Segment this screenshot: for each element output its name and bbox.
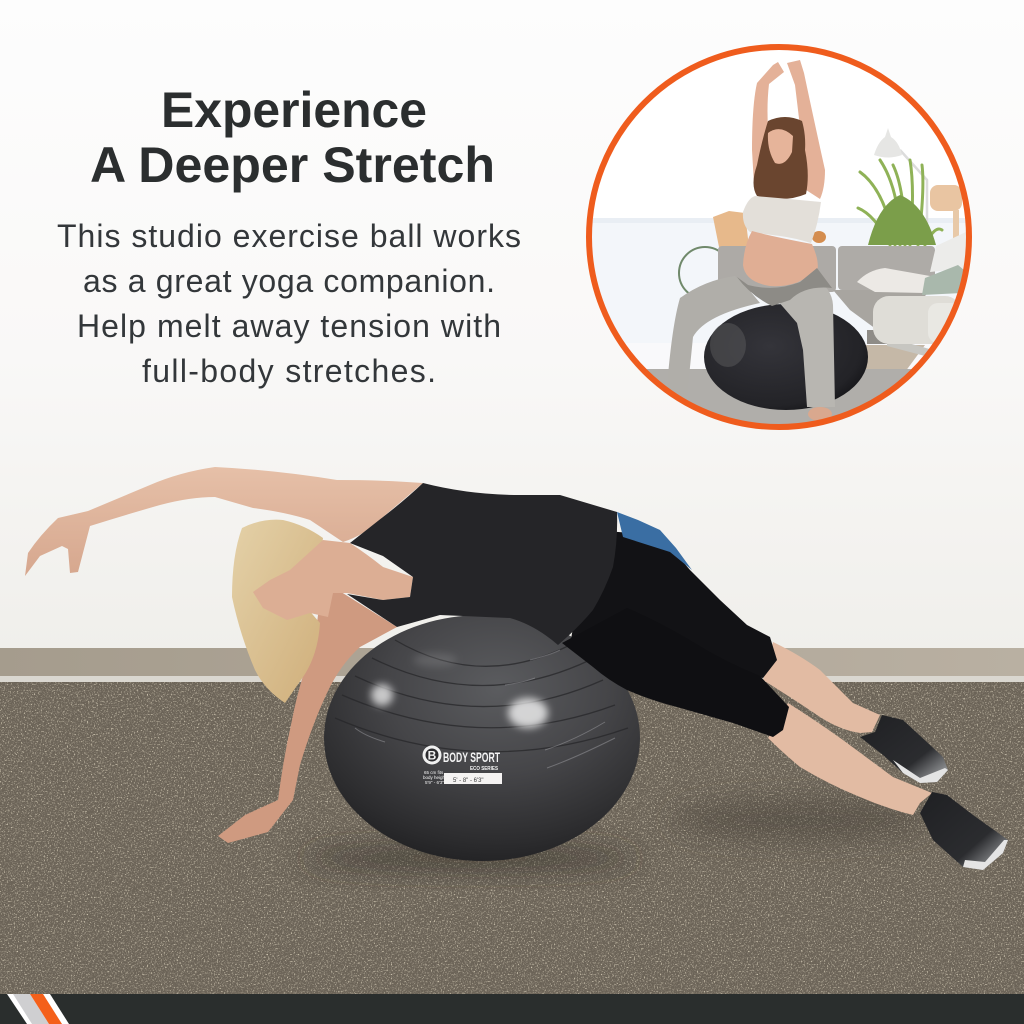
- inset crop top: [743, 196, 821, 243]
- title: A Deeper Stretch: [90, 137, 495, 193]
- extended arm: [25, 467, 423, 576]
- inset hair: [754, 117, 808, 199]
- ball logo: [422, 746, 502, 785]
- blonde hair: [232, 520, 323, 703]
- ball logo: BODY SPORT: [443, 749, 500, 765]
- ball light rib glints: [355, 650, 615, 768]
- basket and bicycle: [679, 211, 826, 299]
- face and neck: [253, 540, 413, 620]
- plant: [858, 160, 942, 245]
- sofa: [718, 232, 968, 356]
- carpet floor: [0, 682, 1024, 994]
- inset arms: [752, 60, 825, 199]
- ball ribs: [335, 640, 628, 752]
- lower legging: [562, 608, 789, 737]
- ball logo: ECO SERIES: [470, 766, 498, 772]
- inset ball reflection: [710, 323, 746, 367]
- body text: This studio exercise ball works: [57, 218, 521, 254]
- ball shadow on carpet: [300, 846, 640, 870]
- inset room background: [592, 218, 966, 424]
- inset foot: [808, 407, 832, 421]
- ball logo: 5' - 8" - 6'3": [453, 778, 484, 784]
- body text: as a great yoga companion.: [83, 263, 495, 299]
- ball highlights: [371, 653, 548, 728]
- inset orange ring: [589, 47, 969, 427]
- inset belly: [743, 231, 818, 286]
- woman on ball: [25, 467, 1008, 870]
- wall background: [0, 0, 1024, 650]
- inset photo: pregnant woman stretching on ball: [585, 40, 975, 439]
- footer stripes: [7, 994, 69, 1024]
- title: Experience: [161, 82, 427, 138]
- ball logo: 5'9" - 6'3": [425, 780, 444, 785]
- lower shoe sole: [963, 840, 1008, 870]
- lamp: [874, 128, 962, 244]
- black tank top: [347, 483, 617, 645]
- title: [90, 82, 495, 193]
- lower shoe: [920, 792, 1008, 870]
- ball logo: 65 cm fits: [424, 770, 444, 775]
- baseboard: [0, 648, 1024, 682]
- inset trousers: [667, 268, 835, 407]
- upper legging: [570, 530, 777, 678]
- body text: full-body stretches.: [142, 353, 436, 389]
- ball logo: body heights: [423, 775, 449, 780]
- calves: [763, 642, 932, 815]
- footer bar: [0, 994, 1024, 1024]
- body text: [57, 218, 521, 389]
- blue waistband: [617, 512, 692, 570]
- upper shoe: [860, 715, 948, 783]
- shadow of legs on carpet: [670, 800, 930, 840]
- inset face: [768, 129, 793, 164]
- ball under inset woman: [704, 304, 868, 410]
- ball logo: B: [428, 748, 437, 762]
- body text: Help melt away tension with: [77, 308, 501, 344]
- upper shoe sole: [893, 760, 948, 783]
- exercise ball: [324, 615, 640, 861]
- supporting arm: [218, 585, 397, 843]
